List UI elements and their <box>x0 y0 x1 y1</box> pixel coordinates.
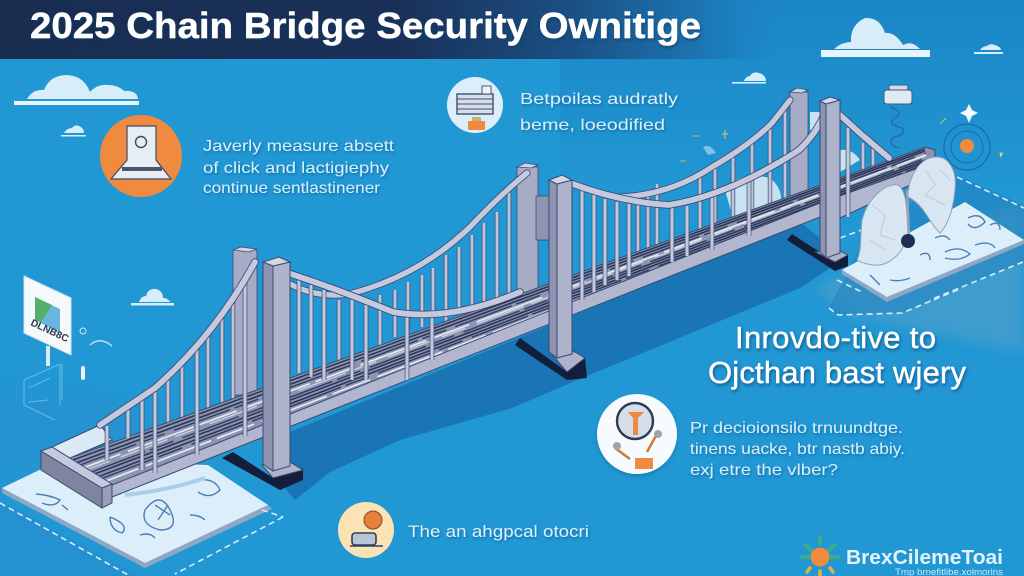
bridge <box>41 88 935 508</box>
title: 2025 Chain Bridge Security Ownitige <box>30 5 701 46</box>
cloud: small left <box>61 125 86 136</box>
deck planks <box>73 149 927 488</box>
cloud: top right <box>821 18 930 57</box>
tower bases <box>222 234 848 490</box>
front cables <box>100 115 889 425</box>
clouds behind bridge <box>725 112 860 225</box>
text block: right: Pr decioionsilo trnuundtge. <box>690 420 903 437</box>
icon: billboard sign: DLNB8C <box>29 318 70 345</box>
icon: orbit with star <box>940 104 1004 170</box>
text block: right: tinens uacke, btr nastb abiy. <box>690 441 905 458</box>
icon: server panel <box>447 77 503 133</box>
icon: orange laptop <box>100 115 182 197</box>
heading: right: Ojcthan bast wjery <box>708 355 966 390</box>
text block: top left measure: Javerly measure absett <box>203 138 395 155</box>
cloud: left of tower <box>131 289 174 306</box>
platform: left <box>0 460 283 576</box>
front towers <box>263 97 840 471</box>
text block: top centre: Betpoilas audratly <box>520 91 678 108</box>
icon: coin bubble <box>338 502 394 558</box>
front hangers <box>107 128 848 473</box>
cloud: far right <box>974 44 1003 54</box>
heading: right: Inrovdo-tive to <box>735 320 936 355</box>
icon: magnifier and tools <box>597 394 677 474</box>
text block: top left measure: continue sentlastinener <box>203 180 381 197</box>
cloud: top left <box>14 75 139 105</box>
icon: floating sparkles <box>680 130 728 161</box>
back cables <box>288 100 790 295</box>
deck surface <box>70 147 935 491</box>
shell-shaped wings <box>857 157 955 265</box>
header band <box>0 0 790 59</box>
abutment <box>41 425 112 508</box>
icon: billboard sign <box>24 276 112 420</box>
text block: top left measure <box>203 138 395 197</box>
icon: hovering module and spring <box>884 85 912 148</box>
text block: top left measure: of click and lactigiephy <box>203 160 389 177</box>
text block: bottom: The an ahgpcal otocri <box>408 522 589 541</box>
heading: right <box>708 320 966 390</box>
text block: top centre <box>520 91 678 134</box>
back hangers <box>168 105 873 430</box>
text block: right: exj etre the vlber? <box>690 462 838 479</box>
brand name: BrexCilemeToai <box>846 547 1003 569</box>
platform: right <box>829 175 1024 315</box>
water shadow under bridge <box>270 222 845 500</box>
text block: right <box>690 420 905 479</box>
cloud: centre <box>732 72 766 84</box>
deck front beam <box>112 165 927 497</box>
icon: brand sun <box>802 537 838 575</box>
back towers <box>233 88 808 395</box>
text block: top centre: beme, loeodified <box>520 117 665 134</box>
